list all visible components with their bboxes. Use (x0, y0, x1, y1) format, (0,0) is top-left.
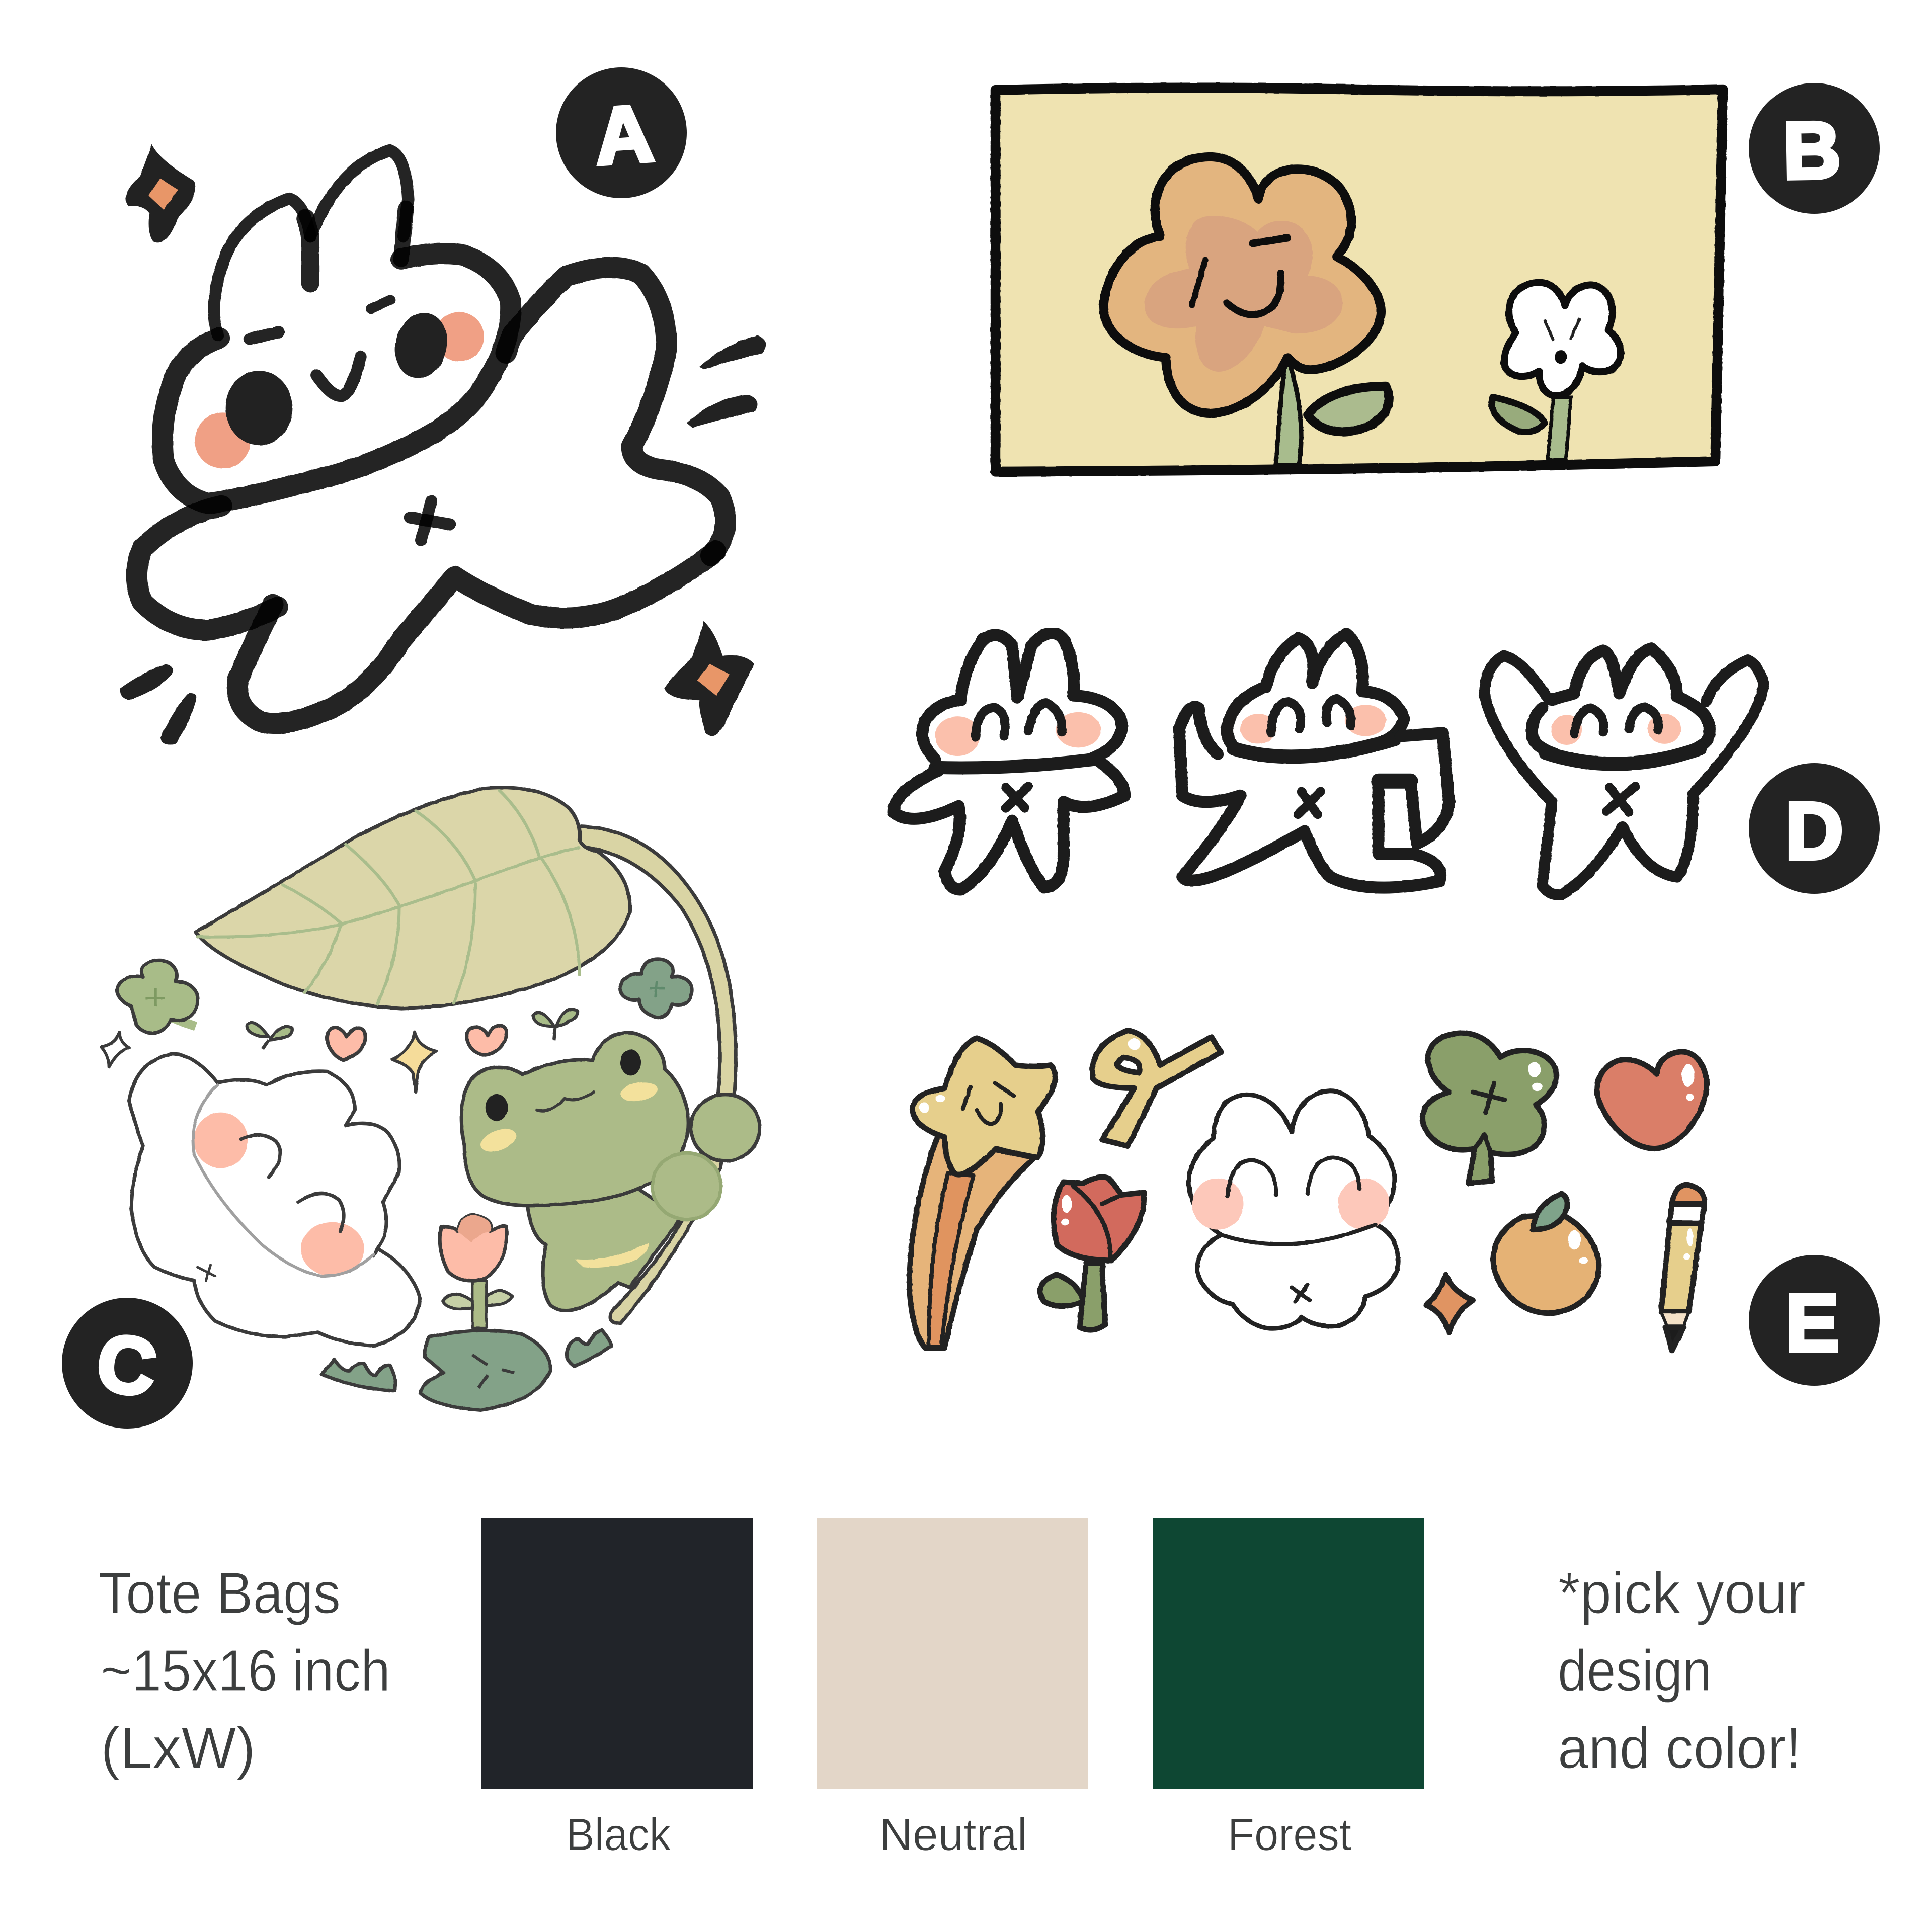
sprouts (247, 1009, 578, 1049)
text block: tote bag size: Tote Bags (99, 1560, 341, 1626)
big flower (1104, 157, 1381, 413)
text block: pick your design: design (1558, 1638, 1712, 1703)
small flower stem (1548, 397, 1571, 460)
badge C: C (92, 1316, 162, 1413)
outline 2 (1179, 634, 1449, 888)
heart (1597, 1052, 1707, 1149)
swatch: neutral (817, 1518, 1088, 1789)
frog belly (575, 1242, 649, 1268)
big flower stem (1276, 363, 1301, 465)
badge B (1749, 83, 1880, 214)
swatch: black (481, 1518, 753, 1789)
cheeks 2 (1240, 705, 1386, 744)
bunny head outline (163, 150, 511, 503)
panel B: flowers (996, 88, 1723, 472)
frog body (527, 1186, 681, 1310)
outline 1 (894, 633, 1124, 890)
clover left (117, 960, 198, 1033)
orange (1493, 1194, 1599, 1313)
small flower (1504, 283, 1621, 396)
big leaf (196, 788, 630, 1009)
clover right (620, 959, 692, 1018)
cheeks 3 (1551, 714, 1681, 745)
sparkles (101, 1032, 437, 1092)
badge D: D (1785, 786, 1843, 876)
label: forest: Forest (1228, 1810, 1351, 1860)
outline 3 (1484, 648, 1764, 895)
small sparkle (1426, 1275, 1473, 1332)
cheeks (195, 312, 484, 468)
badge E: E (1786, 1278, 1839, 1368)
eyes (225, 307, 454, 445)
bunny 2 (1179, 634, 1449, 888)
bunny back outline (129, 1054, 420, 1346)
badge A: A (592, 88, 656, 182)
bunny 3 (1484, 648, 1764, 895)
badge B: B (1782, 105, 1841, 196)
star (913, 1038, 1055, 1174)
badge E (1749, 1255, 1880, 1386)
big flower inner blush (1145, 216, 1343, 372)
small flower face (1545, 319, 1579, 364)
badge C (62, 1298, 193, 1429)
panel E: sticker set (909, 1031, 1707, 1351)
badge D (1749, 763, 1880, 894)
text block: pick your design (1558, 1560, 1806, 1781)
frog cheeks (477, 1080, 659, 1156)
yellow frame (996, 88, 1723, 472)
panel C: frog and bunny under a leaf (101, 788, 760, 1410)
label: black: Black (566, 1810, 671, 1860)
frog head (461, 1033, 688, 1206)
lily pads (321, 1330, 611, 1410)
bunny body outline (137, 268, 726, 724)
label: neutral: Neutral (879, 1810, 1027, 1860)
clover (1423, 1033, 1556, 1184)
cheeks 1 (935, 712, 1101, 756)
bunny cheeks (194, 1113, 364, 1276)
ribbon (1092, 1031, 1221, 1146)
swatch: forest (1153, 1518, 1424, 1789)
frog hands (652, 1095, 760, 1219)
text block: pick your design: and color! (1558, 1715, 1801, 1781)
hearts (327, 1026, 507, 1060)
bunny 1 (894, 633, 1124, 890)
panel A: bunny design (120, 144, 766, 745)
sparkles (126, 144, 754, 736)
text block: tote bag size: (LxW) (101, 1715, 256, 1781)
leaf stem (580, 826, 736, 1323)
bunny eyes and cross (198, 1135, 344, 1281)
text block: tote bag size (99, 1560, 390, 1781)
tulip (440, 1215, 512, 1328)
motion lines (120, 335, 766, 745)
badge A (556, 67, 687, 198)
pencil (1661, 1185, 1704, 1351)
small flower leaf (1492, 397, 1545, 432)
big bunny (1189, 1091, 1398, 1328)
text block: tote bag size: ~15x16 inch (101, 1638, 390, 1703)
brows, smile and belly cross (250, 300, 450, 540)
leaf veins (198, 791, 580, 1004)
frog mouth (537, 1092, 594, 1111)
text block: pick your design: *pick your (1558, 1560, 1806, 1626)
tulip (1040, 1177, 1144, 1330)
big flower face (1192, 238, 1287, 315)
panel D: three bunnies (894, 633, 1764, 895)
big flower leaf (1308, 386, 1389, 432)
bunny face edge (193, 1085, 374, 1276)
shooting star trail (909, 1135, 1034, 1348)
frog eyes (486, 1049, 641, 1121)
